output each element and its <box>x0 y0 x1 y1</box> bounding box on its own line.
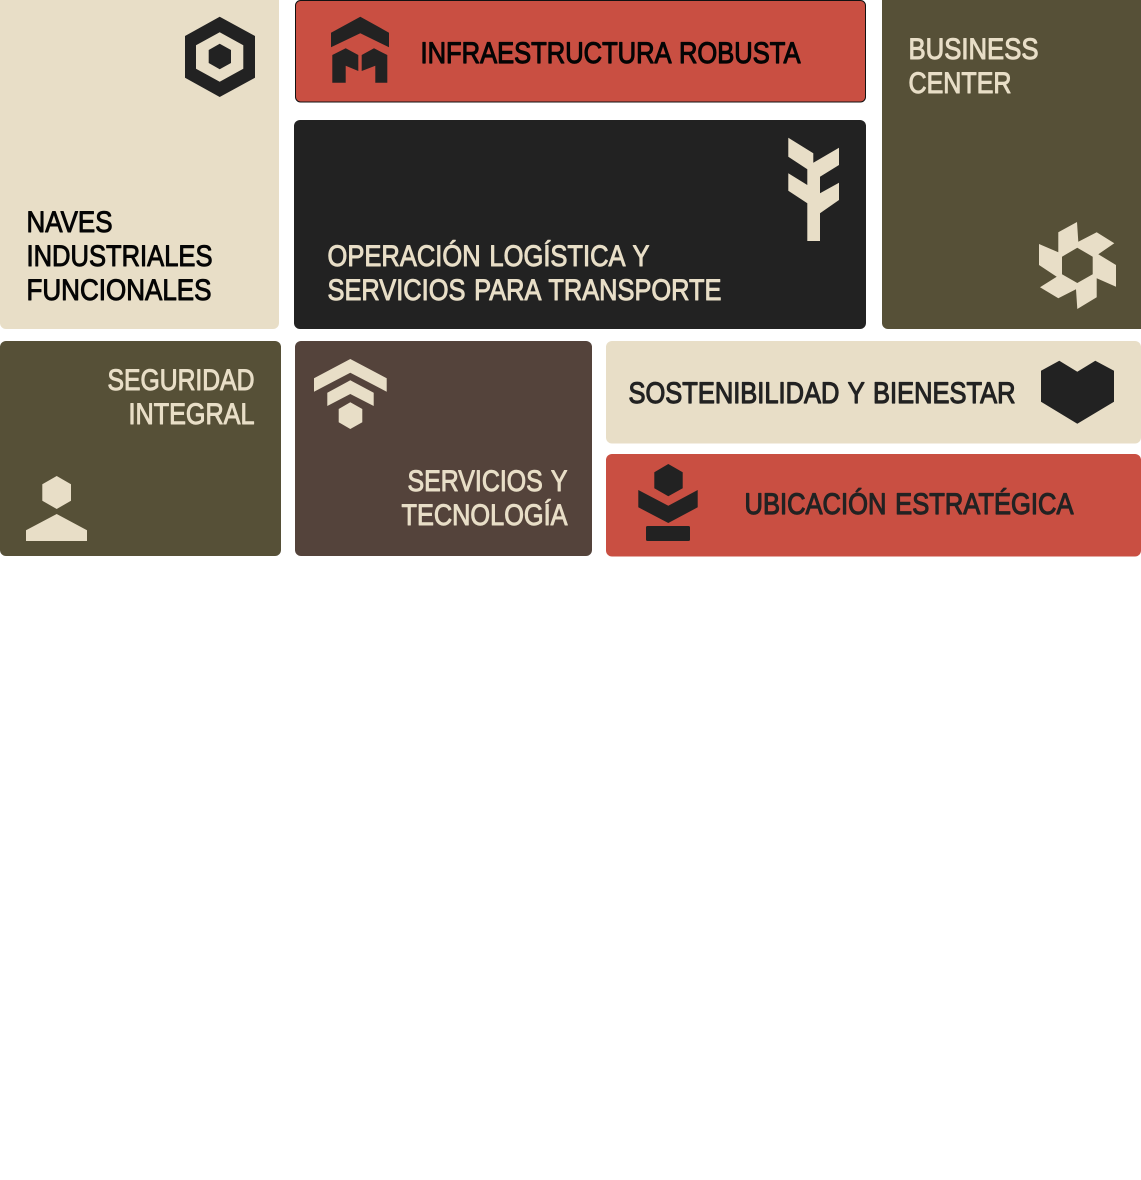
heading: infraestructura robusta: INFRAESTRUCTURA ROBUSTA <box>420 37 800 70</box>
panel background: sostenibilidad <box>606 341 1141 444</box>
heading: business center: CENTER <box>908 67 1012 100</box>
heading: seguridad integral <box>108 364 254 431</box>
heading: business center: BUSINESS <box>908 33 1038 66</box>
icon: person <box>26 476 87 541</box>
panel background: operación <box>294 120 866 329</box>
panel background: infraestructura <box>296 0 866 102</box>
panel: ubicación estratégica <box>606 454 1141 556</box>
icon: branching arrow <box>788 138 839 241</box>
icon: signal <box>314 359 387 429</box>
panel background: business <box>882 0 1141 329</box>
panel: infraestructura robusta <box>296 0 866 102</box>
icon: house <box>331 17 389 83</box>
panel: seguridad integral <box>0 341 281 556</box>
panel background: ubicación <box>606 454 1141 556</box>
heading: seguridad integral: INTEGRAL <box>128 398 254 431</box>
heading: naves industriales funcionales: FUNCIONALES <box>26 274 212 307</box>
heading: servicios y tecnología: TECNOLOGÍA <box>402 499 568 532</box>
panel: operación logística <box>294 120 866 329</box>
heading: naves industriales funcionales <box>26 206 212 307</box>
heading: naves industriales funcionales: NAVES <box>26 206 112 239</box>
icon: location marker <box>638 464 698 541</box>
panel background: servicios <box>295 341 592 556</box>
heading: seguridad integral: SEGURIDAD <box>108 364 254 397</box>
panel: sostenibilidad y bienestar <box>606 341 1141 444</box>
panel: servicios y tecnología <box>295 341 592 556</box>
icon: heart <box>1041 361 1114 424</box>
panel: business center <box>882 0 1141 329</box>
heading: servicios y tecnología <box>402 465 568 532</box>
panel background: seguridad <box>0 341 281 556</box>
heading: servicios y tecnología: SERVICIOS Y <box>408 465 568 498</box>
panel background: naves <box>0 0 279 329</box>
icon: hexagon ring <box>185 17 255 97</box>
heading: business center <box>908 33 1038 100</box>
heading: operación logística y servicios para transporte: SERVICIOS PARA TRANSPORTE <box>328 274 722 307</box>
heading: naves industriales funcionales: INDUSTRIALES <box>26 240 212 273</box>
heading: operación logística y servicios para transporte: OPERACIÓN LOGÍSTICA Y <box>328 240 650 273</box>
heading: sostenibilidad y bienestar: SOSTENIBILIDAD Y BIENESTAR <box>628 377 1016 410</box>
heading: operación logística y servicios para transporte <box>328 240 722 307</box>
icon: gear star <box>1039 222 1116 309</box>
panel: naves industriales <box>0 0 279 329</box>
heading: ubicación estratégica: UBICACIÓN ESTRATÉGICA <box>744 488 1074 521</box>
